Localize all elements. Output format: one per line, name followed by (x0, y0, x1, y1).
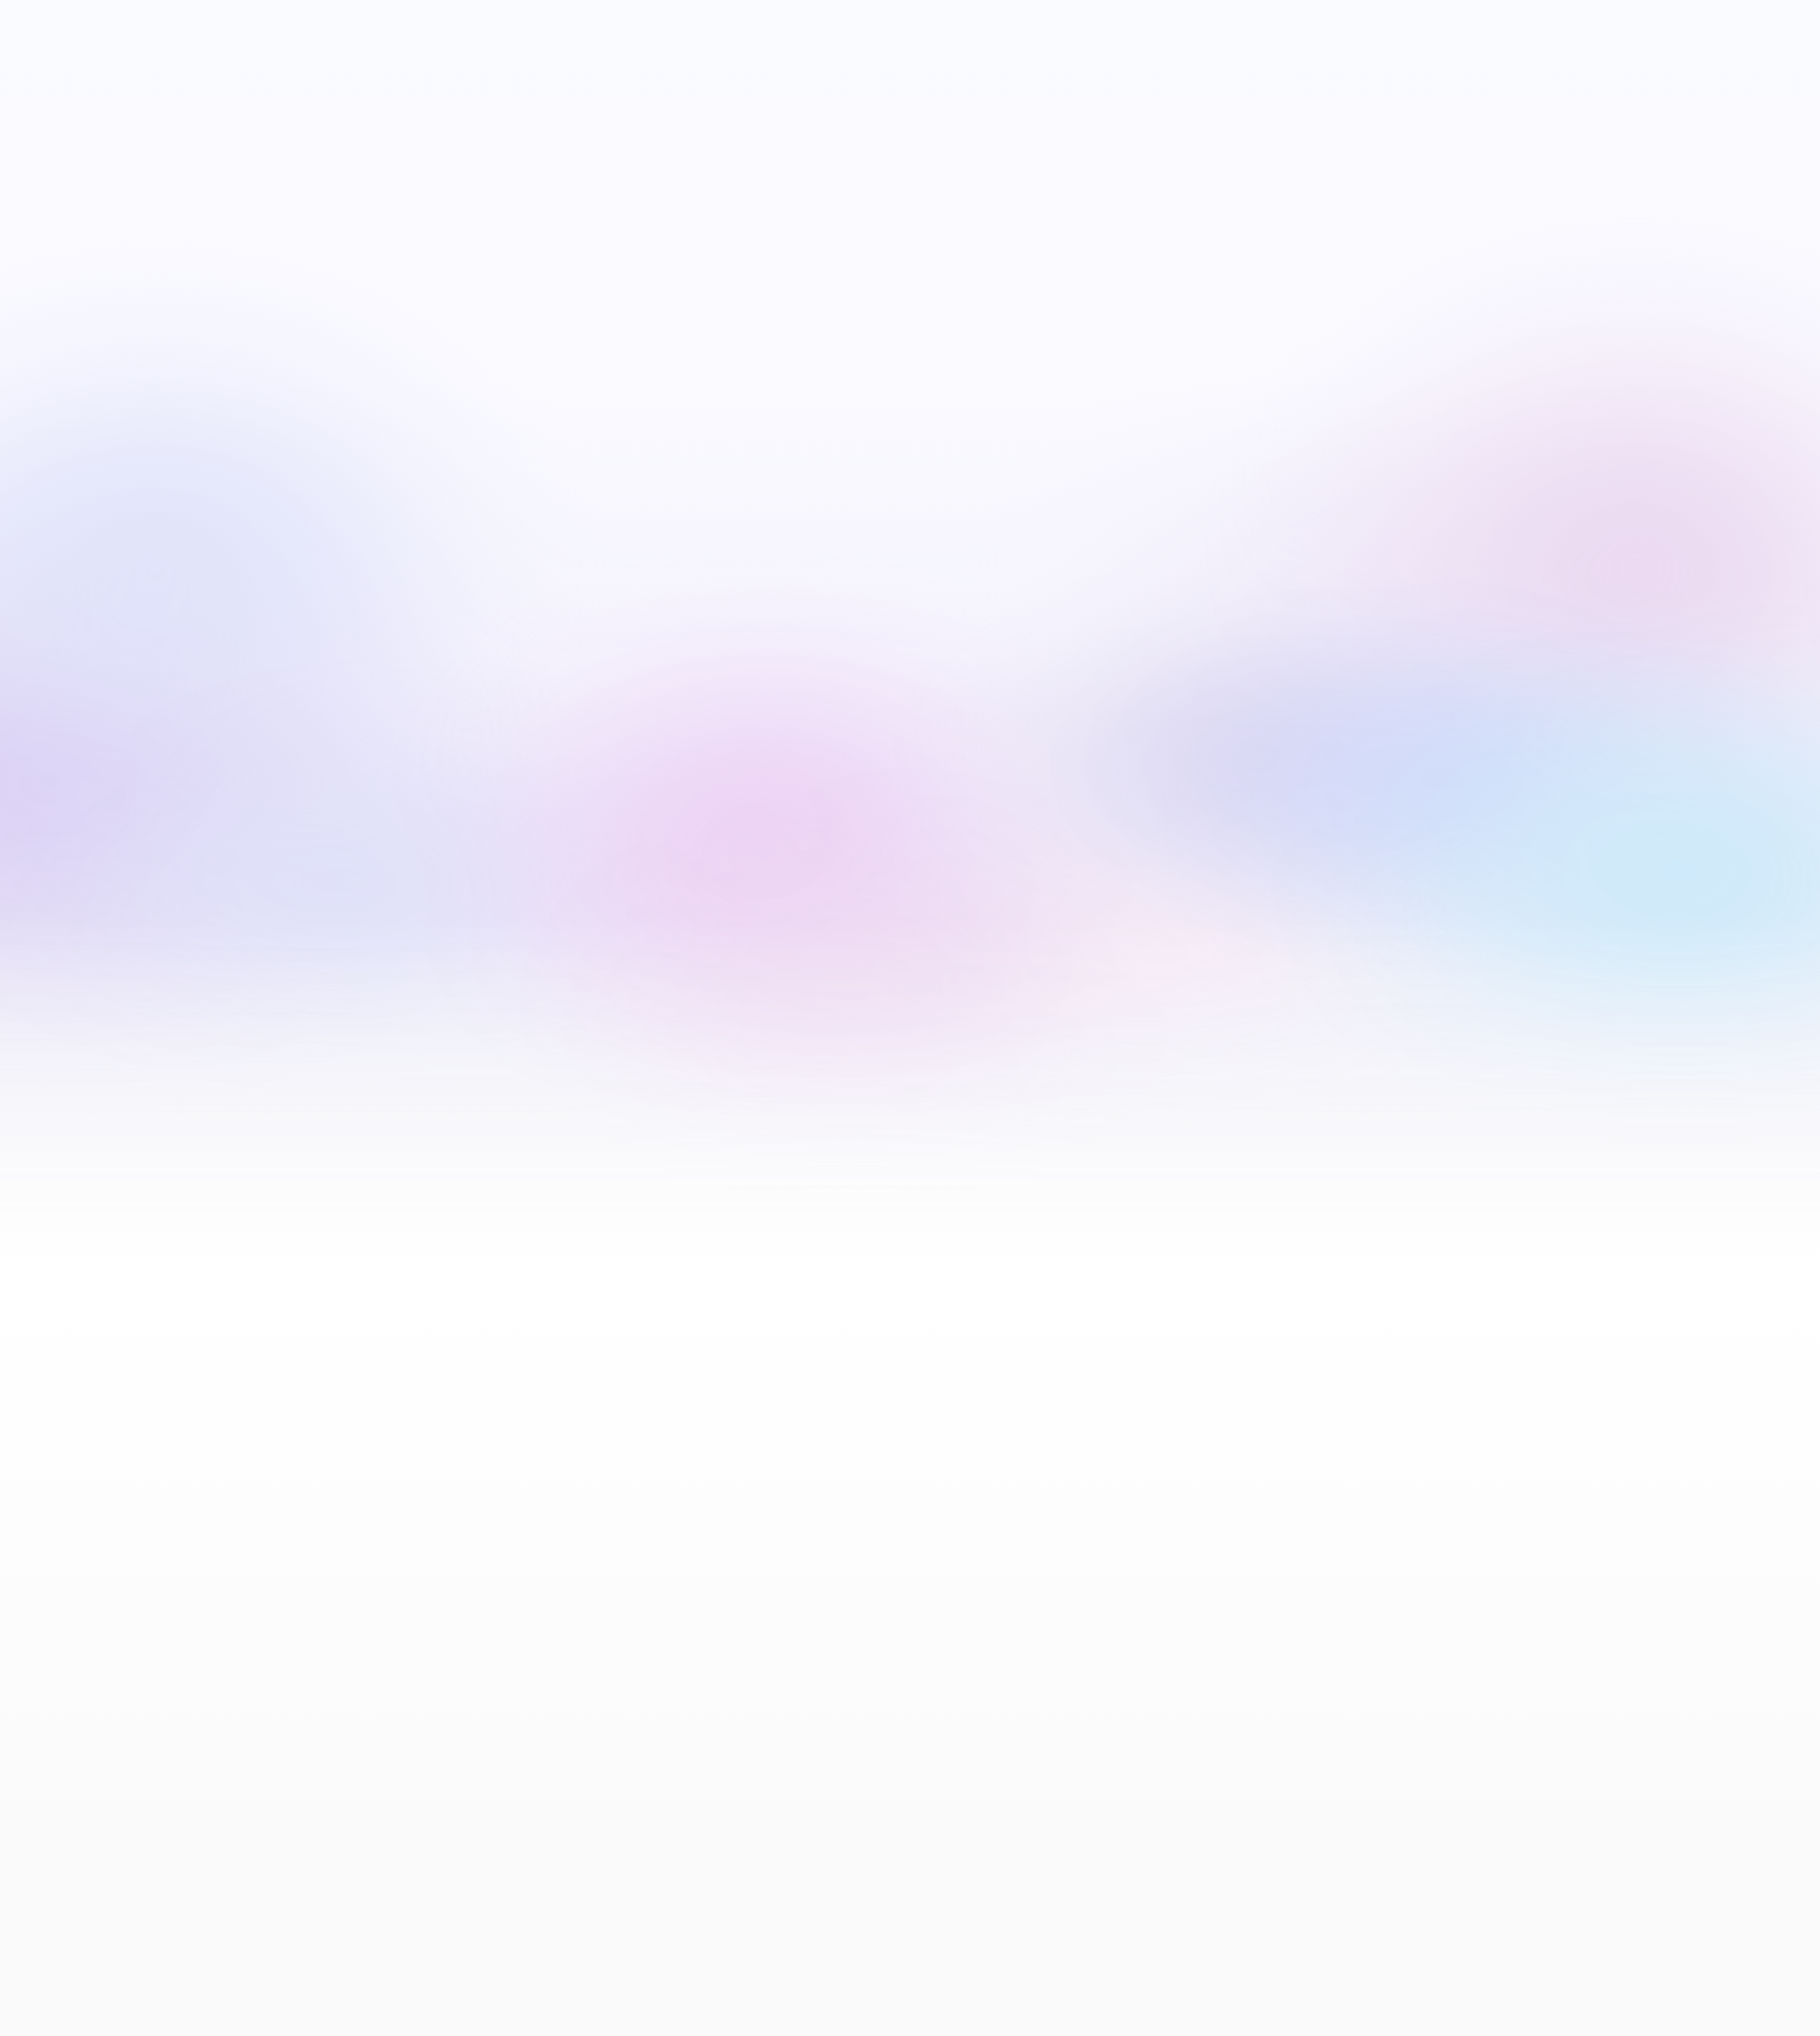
blob: centre pink (530, 647, 1019, 995)
background canvas (0, 258, 1820, 1139)
blob: upper-left blue (0, 355, 415, 737)
blob: centre lower pink (883, 1034, 889, 1036)
blob: lower-right sky blue (1219, 588, 1820, 1156)
wash: lavender band across the middle (0, 610, 1820, 1089)
blob: upper-right pink (1198, 206, 1820, 929)
blob: right periwinkle (1035, 560, 1820, 1000)
blob: left violet (0, 613, 369, 1011)
colour blob layer (0, 324, 1820, 1114)
blob: soft lower-middle pink (1201, 954, 1205, 955)
blob: lower-left periwinkle (252, 777, 544, 980)
blob: right lavender (879, 553, 1644, 964)
blob: faint diagonal lavender (1209, 537, 1369, 604)
